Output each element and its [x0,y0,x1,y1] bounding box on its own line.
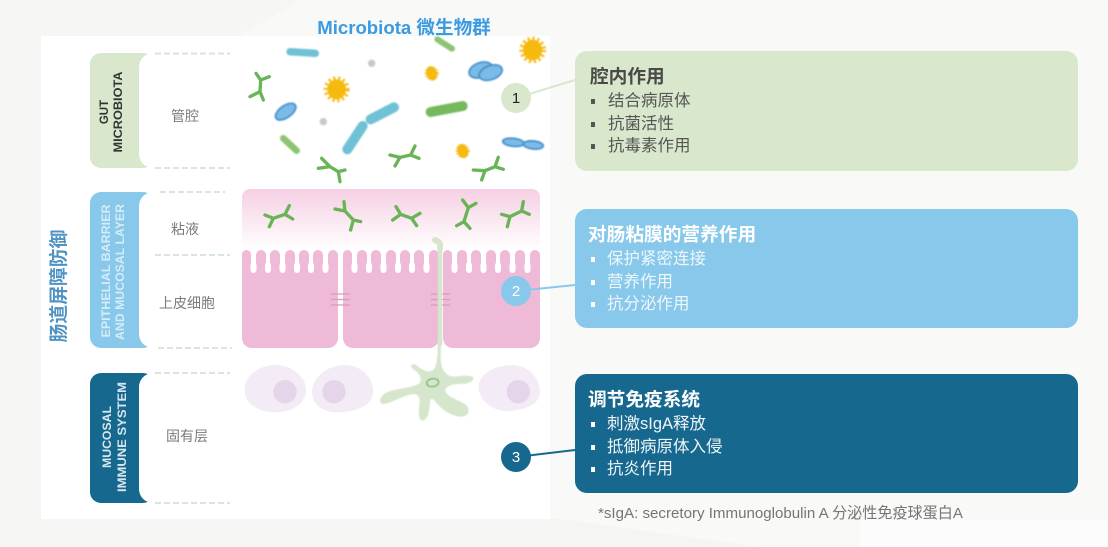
layer labels: 上皮细胞 [159,295,215,311]
antibodies in mucus [265,200,529,230]
footnote: *sIgA: secretory Immunoglobulin A 分泌性免疫球蛋白A [598,505,963,522]
vertical heading: 肠道屏障防御 [48,229,69,342]
tab: mucosal immune system [90,373,199,503]
item: 抗毒素作用 [608,137,690,155]
tab: gut microbiota: GUT [99,100,111,124]
item: 刺激sIgA释放 [607,415,706,433]
item: 抗炎作用 [607,460,673,478]
connector 3 [501,442,575,472]
dendritic cell [380,240,473,421]
layer labels: 固有层 [166,428,208,444]
card heading: 腔内作用 [590,66,665,87]
tab: epithelial barrier: EPITHELIAL BARRIER [101,204,113,338]
antibodies in lumen [250,73,503,182]
connector 1 [501,80,575,113]
plasma cells [245,365,540,412]
item: 营养作用 [607,273,673,291]
layer labels: 粘液 [171,221,199,237]
tab: gut microbiota [90,53,199,168]
card: lumen effects [575,51,1078,171]
item: 抗菌活性 [608,115,674,133]
card: mucosal nutrition [575,209,1078,328]
card heading: 对肠粘膜的营养作用 [588,224,756,245]
layer labels [159,108,215,444]
tab: mucosal immune system: MUCOSAL [102,406,114,468]
item: 抗分泌作用 [607,295,690,313]
tab: epithelial barrier [90,192,199,348]
tab: gut microbiota: MICROBIOTA [113,72,125,152]
epithelial cells [242,250,540,348]
card: immune regulation [575,374,1078,493]
white diagram panel [41,36,550,519]
mucus layer [242,189,540,250]
title: Microbiota 微生物群 [317,17,491,38]
item: 结合病原体 [608,92,690,110]
item: 保护紧密连接 [607,250,706,268]
card heading: 调节免疫系统 [588,389,700,410]
microbes [273,39,544,160]
tab: mucosal immune system: IMMUNE SYSTEM [117,382,129,492]
connector 2 [501,276,575,306]
layer labels: 管腔 [171,108,199,124]
connector 3: 3 [512,449,520,466]
connector 2: 2 [512,283,520,300]
item: 抵御病原体入侵 [607,438,722,456]
tab: epithelial barrier: AND MUCOSAL LAYER [115,203,127,340]
connector 1: 1 [512,90,520,107]
